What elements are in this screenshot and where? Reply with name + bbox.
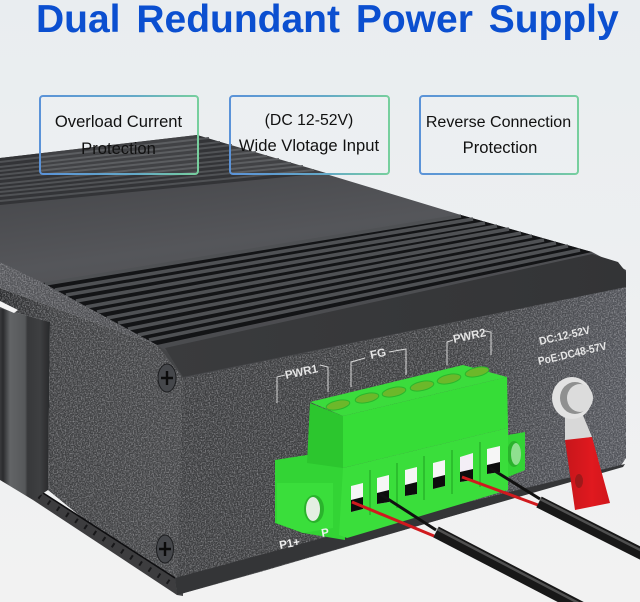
label P (partly hidden): P <box>320 527 330 540</box>
callout: overload: Protection <box>81 139 156 158</box>
screw: lower <box>156 535 174 563</box>
callout: reverse connection: Reverse Connection <box>426 113 571 131</box>
slot ribs <box>370 442 480 515</box>
plug top face <box>310 365 507 416</box>
label PWR2: PWR2 <box>452 327 487 346</box>
green terminal block <box>275 365 525 540</box>
port bracket labels <box>277 331 491 403</box>
speckled powder coat <box>0 262 626 595</box>
front face <box>177 287 626 595</box>
callout: reverse connection: Protection <box>463 138 537 157</box>
cable: right pair <box>462 468 640 558</box>
right flange <box>508 432 525 477</box>
voltage label: DC:12-52V <box>538 324 592 348</box>
label PWR1: PWR1 <box>284 363 320 382</box>
callout: wide voltage <box>230 96 389 174</box>
rear heat-sink fins <box>0 135 326 205</box>
top cover <box>0 135 626 380</box>
label P1+: P1+ <box>278 536 301 552</box>
callout: overload <box>40 96 198 174</box>
side face <box>0 288 183 596</box>
voltage label <box>537 324 608 368</box>
bottom teeth <box>33 491 177 595</box>
callout: wide voltage: (DC 12-52V) <box>265 112 353 129</box>
screw holes <box>325 365 490 412</box>
plug front upper <box>343 377 508 468</box>
voltage label: PoE:DC48-57V <box>537 340 608 368</box>
front lip <box>165 254 626 377</box>
callout: overload: Overload Current <box>55 112 183 131</box>
left flange <box>275 455 345 540</box>
ground ring terminal <box>552 377 610 510</box>
callout: reverse connection <box>420 96 578 174</box>
device: industrial switch <box>0 135 626 596</box>
label FG: FG <box>369 347 387 362</box>
plug front lower <box>339 428 508 538</box>
wire slots <box>351 446 500 512</box>
left side of plug <box>307 403 343 468</box>
front heat-sink fins <box>43 215 592 345</box>
cable: left pair <box>352 494 590 602</box>
callout: wide voltage: Wide Vlotage Input <box>239 136 379 155</box>
bottom lip <box>175 464 625 595</box>
screw: upper <box>158 364 176 392</box>
rail clip <box>0 301 50 500</box>
